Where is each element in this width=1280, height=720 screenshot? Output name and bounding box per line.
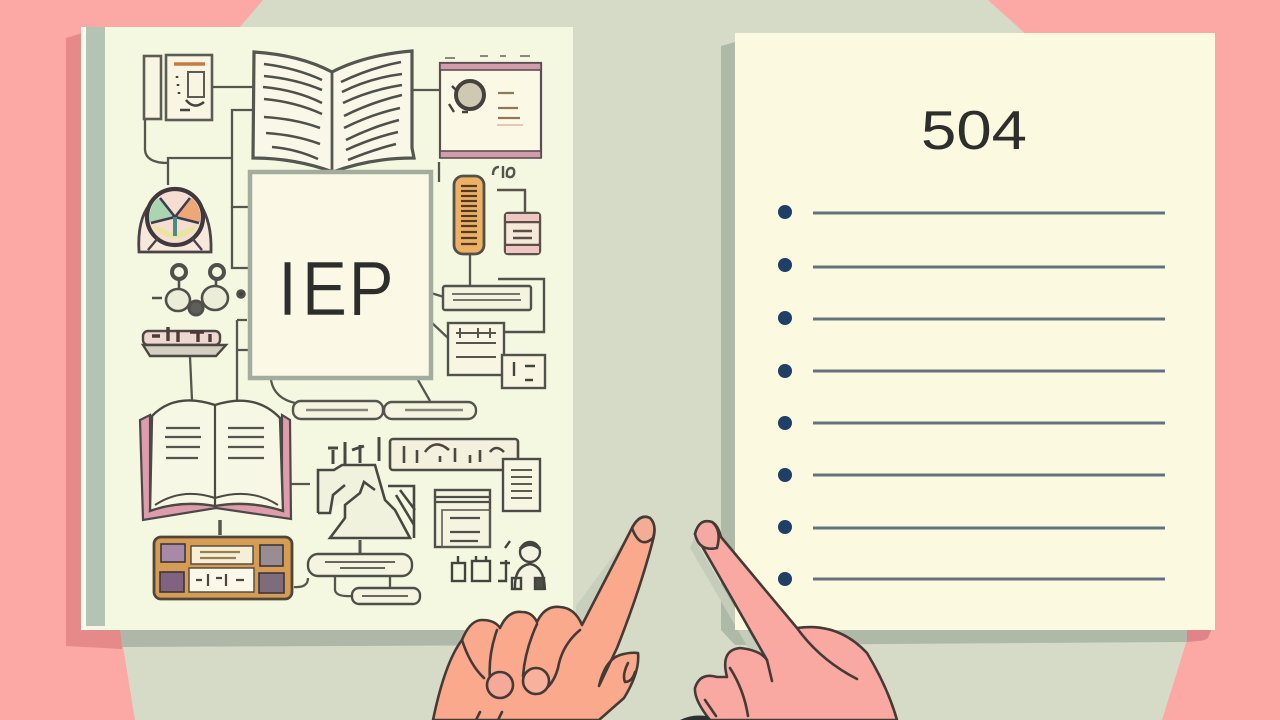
document spine (86, 27, 105, 626)
panel: IEP document (81, 27, 573, 630)
panel: 504 document (735, 33, 1215, 630)
icon: pill labels (293, 401, 476, 419)
shadow: beside right index finger (690, 538, 770, 668)
document page (81, 27, 573, 630)
IEP central box (250, 172, 431, 378)
heading: IEP: IEP (278, 246, 394, 332)
icon: lower pill labels (308, 554, 420, 604)
shadow: beside left index finger (576, 540, 625, 624)
document page (735, 33, 1215, 630)
shadow: IEP document on sage (120, 628, 590, 647)
shadow: 504 document (721, 42, 1187, 645)
icon: banner strip (390, 439, 518, 470)
shadow: 504 document corner on pink (1187, 628, 1212, 642)
icon: small stacked drum (497, 190, 540, 254)
icon: linked figures (152, 265, 244, 315)
icon: orange list capsule (454, 176, 484, 254)
connector lines (145, 87, 470, 596)
icon: pink open book (140, 400, 291, 520)
checklist rows (778, 205, 792, 586)
heading: 504: 504 (921, 99, 1027, 161)
icon: stepped mountain diagram (318, 437, 415, 538)
icon: small glyph tag (493, 166, 514, 178)
icon: orange control panel (154, 537, 292, 599)
icon: document sheet (503, 459, 540, 511)
hand sleeve fragment (680, 716, 712, 720)
icon: right hand pointing (695, 521, 897, 720)
icon: form sheet top left (144, 55, 212, 120)
document edge (81, 27, 87, 630)
icon: large open book (253, 51, 414, 172)
icon: slide board top right (440, 56, 541, 158)
icon: small people (452, 541, 545, 590)
icon: left hand pointing (433, 517, 654, 720)
icon: window sheet (435, 490, 490, 547)
icon: cross section fan diagram (139, 189, 211, 252)
shadow: IEP document (66, 33, 122, 649)
icon: labelled tray (143, 327, 226, 356)
icon: clipboard grid (443, 279, 545, 388)
